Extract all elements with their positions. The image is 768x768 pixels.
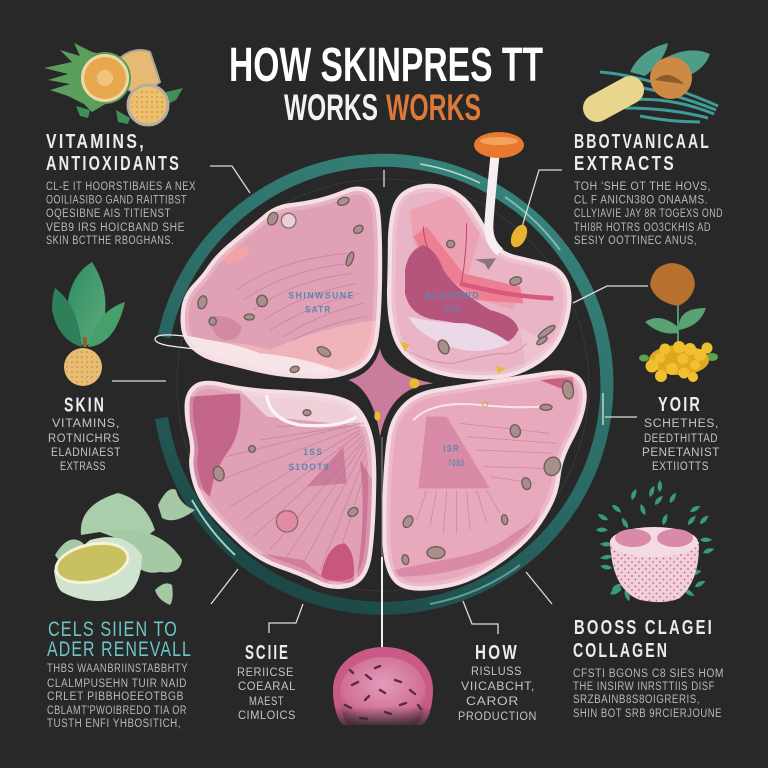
text block: vitamins: OQESIBNE AIS TITIENST [46, 208, 171, 220]
text block: how: CAROR [466, 696, 519, 708]
text block: botanical extracts: TOH 'SHE OT THE HOVS, [574, 181, 711, 193]
text block: vitamins: CL-E IT HOORSTIBAIES A NEX [46, 181, 196, 193]
lobe labels: 7OBS [448, 458, 465, 468]
text block: boost collagen: COLLAGEN [573, 640, 669, 662]
lobe labels: BLEUNWD [425, 290, 480, 300]
text block: scie [237, 642, 296, 722]
text block: botanical extracts: THI8R HOTRS OO3CKHIS AD [574, 222, 711, 234]
text block: how: VIICABCHT, [461, 681, 535, 693]
lobe labels: 1SS [303, 447, 323, 457]
text block: scie: CIMLOICS [238, 710, 296, 722]
text block: how: RISLUSS [471, 666, 522, 678]
text block: vitamins: VEB9 IRS HOICBAND SHE [46, 222, 185, 234]
text block: skin: VITAMINS, [52, 418, 120, 430]
leader lines [112, 166, 648, 648]
text block: botanical extracts [574, 131, 723, 247]
text block: vitamins: VITAMINS, [46, 131, 146, 153]
text block: boost collagen: CFSTI BGONS C8 SIES HOM [573, 668, 724, 680]
text block: scie: COEARAL [238, 681, 296, 693]
text block: skin [48, 394, 121, 473]
icon: root and nut with waves [597, 43, 718, 122]
lobe: bottom left [187, 383, 377, 587]
title: HOW SKINPRES TT [229, 39, 543, 92]
text block: botanical extracts: CL F ANICN38O ONAAMS. [574, 194, 708, 206]
text block: vitamins: SKIN BCTTHE RBOGHANS. [46, 235, 174, 247]
icon: citrus slices with leaves [44, 43, 183, 125]
text block: yoir: YOIR [658, 394, 702, 416]
text block: scie: MAEST [249, 696, 284, 708]
text block: how [458, 642, 537, 723]
text block: cell renewal: TUSTH ENFI YHBOSITICH, [47, 718, 181, 730]
icon: bowl of skin with sprigs [596, 480, 715, 602]
text block: how: PRODUCTION [458, 711, 537, 723]
text block: vitamins: ANTIOXIDANTS [46, 153, 181, 175]
lobe: bottom right [384, 372, 585, 589]
text block: how: HOW [475, 642, 519, 664]
text block: scie: SCIIE [245, 642, 290, 664]
icon: pink dome cross-section [333, 647, 433, 726]
lobe: top right [389, 186, 573, 377]
text block: boost collagen: SRZBAINB8S8OIGRERIS, [573, 694, 700, 706]
lobe: top left [180, 189, 380, 383]
text block: skin: ROTNICHRS [48, 433, 120, 445]
text block: boost collagen: SHIN BOT SRB 9RCIERJOUNE [573, 708, 722, 720]
lobe labels: S1OOT9 [288, 462, 330, 472]
text block: yoir: EXTIIOTTS [652, 461, 709, 473]
text block: botanical extracts: EXTRACTS [574, 153, 676, 175]
text block: cell renewal: CELS SIIEN TO [48, 618, 178, 641]
text block: botanical extracts: BBOTVANICAAL [574, 131, 711, 153]
icon: lime with pale leaves [51, 489, 195, 605]
title: WORKS [284, 87, 378, 128]
lobe labels: SHINWSUNE [288, 290, 355, 300]
text block: yoir [642, 394, 720, 473]
text block: cell renewal: THBS WAANBRIINSTABBHTY [47, 663, 188, 675]
text block: yoir: PENETANIST [642, 447, 720, 459]
icon: nut, sprout and yellow berries [639, 263, 718, 382]
text block: scie: RERIICSE [237, 667, 294, 679]
text block: yoir: DEEDTHITTAD [644, 433, 718, 445]
icon: yellow capsule [508, 222, 530, 250]
text block: botanical extracts: SESIY OOTTINEC ANUS, [574, 235, 697, 247]
text block: cell renewal: CLALMPUSEHN TUIR NAID [47, 678, 187, 690]
icon: orange capsule with white tube [474, 132, 524, 252]
text block: vitamins [46, 131, 196, 247]
text block: cell renewal [47, 618, 192, 730]
text block: botanical extracts: CLLYIAVIE JAY 8R TOGEXS OND [574, 208, 723, 220]
title: WORKS [386, 87, 481, 128]
text block: boost collagen [573, 617, 724, 720]
text block: cell renewal: ADER RENEVALL [47, 638, 192, 661]
text block: yoir: SCHETHES, [644, 418, 719, 430]
text block: boost collagen: THE INSIRW INRSTTIIS DISF [573, 681, 715, 693]
text block: cell renewal: CRLET PIBBHOEEOTBGB [47, 691, 184, 703]
lobe labels: JOII [443, 305, 462, 315]
four skin lobes [180, 186, 585, 589]
text block: boost collagen: BOOSS CLAGEI [574, 617, 714, 639]
text block: cell renewal: CBLAMT'PWOIBREDO TIA OR [47, 705, 187, 717]
text block: skin: SKIN [64, 394, 106, 416]
lobe labels: SATR [305, 305, 332, 315]
circular ring [162, 160, 607, 608]
text block: skin: ELADNIAEST [51, 447, 121, 459]
icon: leaves with seed ball [52, 262, 125, 386]
text block: vitamins: OOILIASIBO GAND RAITTIBST [46, 194, 187, 206]
center star [348, 348, 433, 437]
lobe labels: ISR [443, 444, 460, 454]
title [229, 39, 543, 128]
lobe labels [288, 290, 480, 472]
text block: skin: EXTRASS [60, 461, 106, 473]
